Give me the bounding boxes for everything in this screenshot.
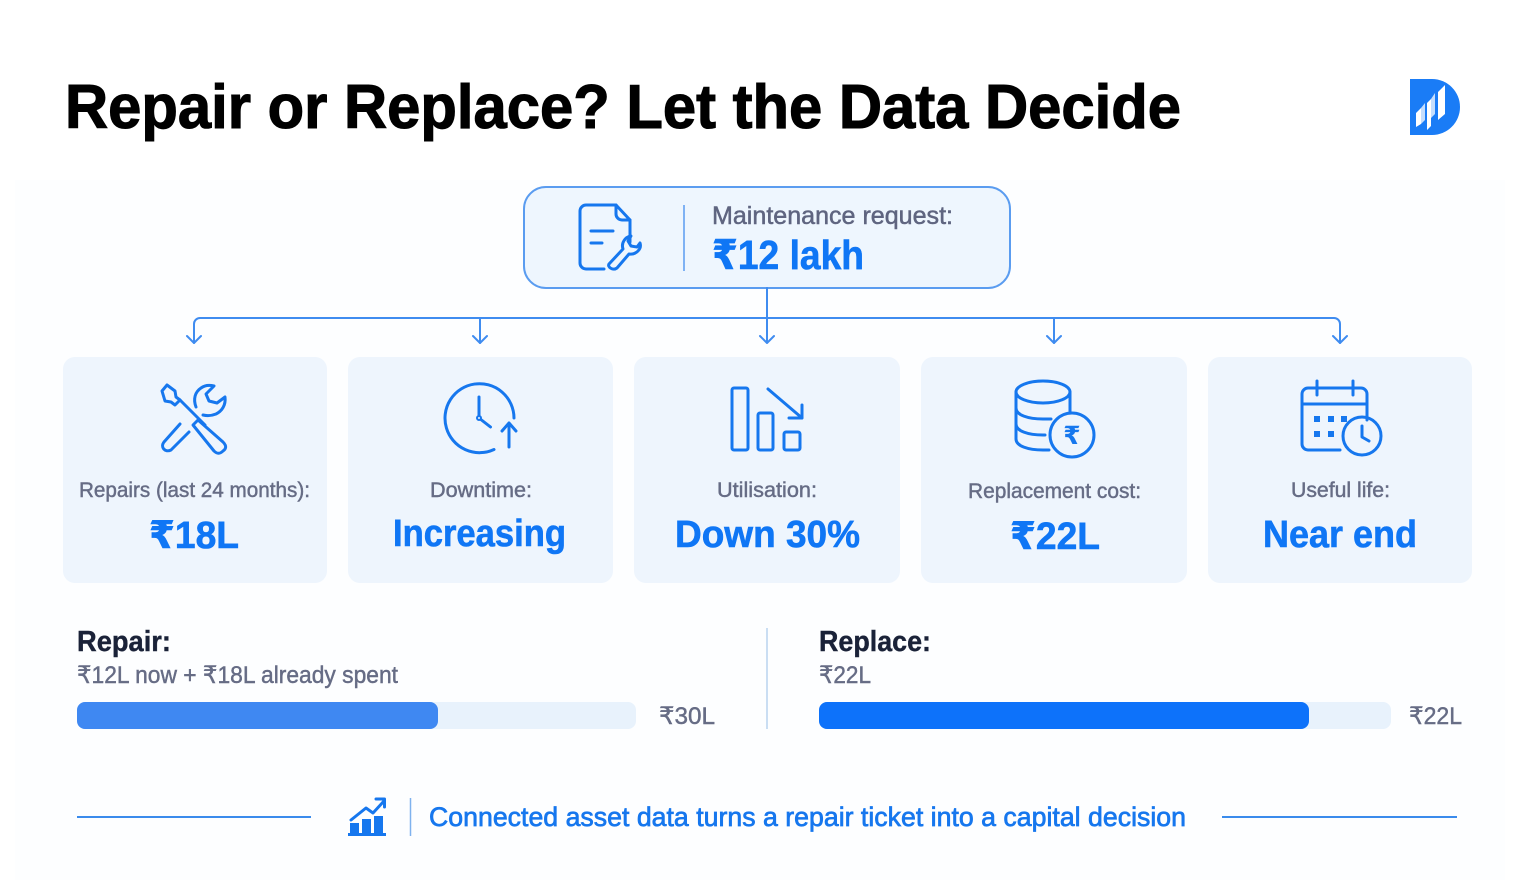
label: repairs: Repairs (last 24 months): [79,479,310,502]
text: repair breakdown: ₹12L now + ₹18L already spent [77,662,398,689]
label: useful life: Useful life: [1291,479,1390,502]
bar: repair total [77,702,636,729]
icon: brand logo [1410,79,1460,135]
icon: calendar dots [1314,416,1347,437]
heading: replace: Replace: [819,626,931,658]
text: takeaway: Connected asset data turns a repair ticket into a capital decision [429,802,1186,832]
flow connector arrows [187,288,1347,343]
value: near end: Near end [1263,514,1417,556]
text: replace cost: ₹22L [819,662,871,689]
icon: calendar with clock [1302,381,1381,455]
icon: database with rupee coin [1016,381,1094,457]
label: utilisation: Utilisation: [717,479,817,502]
icon: clock with up arrow [445,384,516,453]
value: increasing: Increasing [393,513,566,555]
icon: rupee sign: ₹ [1063,422,1081,450]
label: replacement cost: Replacement cost: [968,480,1141,503]
value: 12 lakh: ₹12 lakh [712,232,864,278]
value: down 30 percent: Down 30% [675,514,860,556]
panel: replacement cost card [921,357,1187,583]
bar: replace total [819,702,1391,729]
value: 22L: ₹22L [1010,516,1100,558]
footer callout [77,798,1457,836]
value: 22L: ₹22L [1409,703,1462,730]
heading: repair: Repair: [77,626,171,658]
label: maintenance request: Maintenance request: [712,202,953,230]
panel: repairs card [63,357,327,583]
value: 18L: ₹18L [149,515,239,557]
panel: downtime card [348,357,613,583]
value: 30L: ₹30L [659,703,715,730]
icon: document with wrench [580,205,640,269]
icon: rising bar chart [348,799,386,836]
title: Repair or Replace? Let the Data Decide [65,73,1181,142]
panel: replace comparison [819,626,1462,730]
icon: falling bars [732,388,802,450]
panel: repair comparison [77,626,715,730]
panel: maintenance request [524,187,1010,288]
panel: utilisation card [634,357,900,583]
panel: useful life card [1208,357,1472,583]
label: downtime: Downtime: [430,479,532,502]
icon: crossed tools [162,385,226,453]
